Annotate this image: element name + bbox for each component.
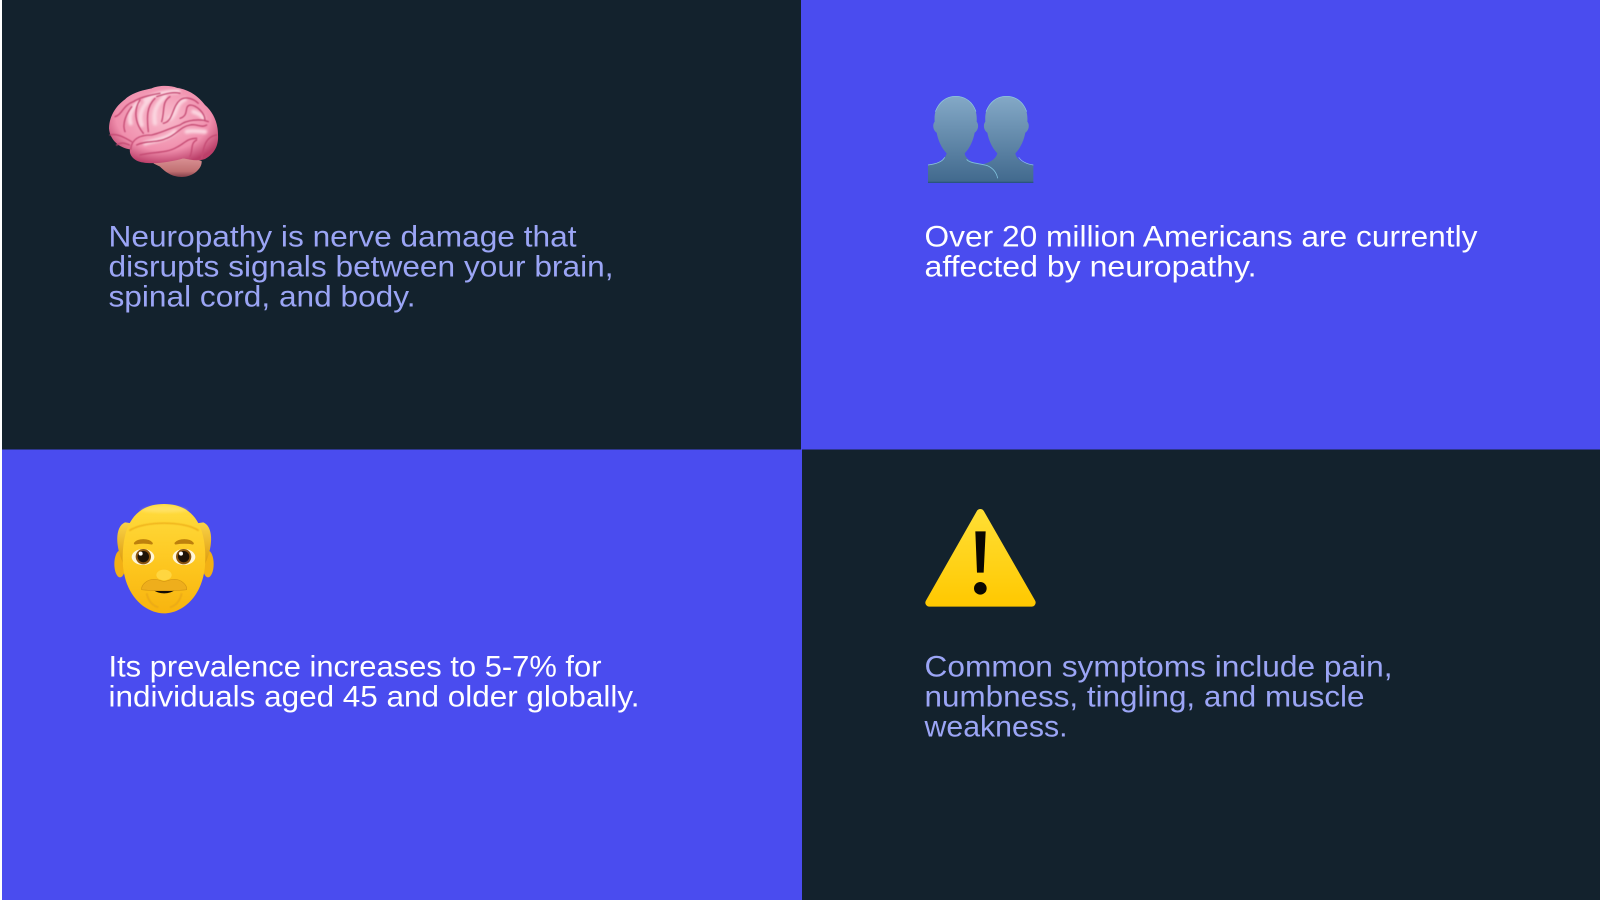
- icon: brain: [109, 86, 218, 177]
- text: prevalence in Americans: [924, 220, 1478, 284]
- text: prevalence in Americans: affected by neuropathy.: [924, 250, 1256, 284]
- panel: symptoms: [802, 450, 1600, 900]
- text: neuropathy definition: disrupts signals between your brain,: [108, 250, 614, 284]
- text: common symptoms: numbness, tingling, and muscle: [924, 680, 1364, 714]
- text: common symptoms: [923, 650, 1392, 744]
- text: age prevalence: individuals aged 45 and older globally.: [108, 680, 640, 714]
- icon: two people silhouettes: [928, 96, 1033, 183]
- panel: prevalence by age: [2, 450, 802, 900]
- icon: older man face: [114, 504, 214, 613]
- text: neuropathy definition: spinal cord, and body.: [108, 280, 416, 314]
- panel: what is neuropathy: [2, 0, 801, 450]
- text: neuropathy definition: [108, 220, 614, 314]
- text: age prevalence: [108, 650, 640, 714]
- text: age prevalence: Its prevalence increases to 5-7% for: [108, 650, 602, 684]
- text: common symptoms: weakness.: [923, 710, 1068, 744]
- panel: how many affected: [801, 0, 1600, 450]
- text: common symptoms: Common symptoms include pain,: [924, 650, 1392, 684]
- text: prevalence in Americans: Over 20 million Americans are currently: [924, 220, 1478, 254]
- icon: warning triangle: [929, 513, 1032, 603]
- text: neuropathy definition: Neuropathy is nerve damage that: [108, 220, 577, 254]
